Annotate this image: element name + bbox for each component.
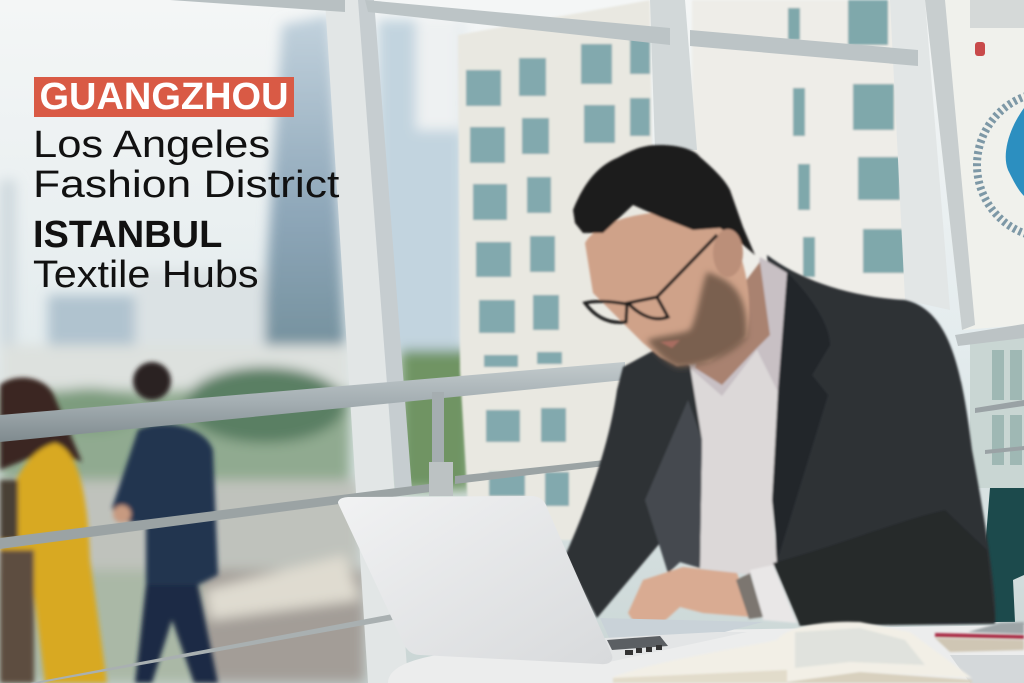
jacket right side [767,255,995,626]
person in navy suit [112,362,218,683]
beard [647,272,747,367]
right side railing and building [955,324,1024,488]
teal chair [982,488,1024,622]
shirt [690,258,787,575]
table [388,625,1024,683]
hand [628,567,752,627]
wristwatch [736,573,763,619]
hair [573,145,755,255]
background: blurred tower behind centre window [378,20,472,490]
wall poster with world map dial [925,0,1024,330]
lapel [767,255,830,558]
ear [713,229,743,277]
window frames [170,0,950,683]
glasses [585,235,717,322]
text: Textile Hubs: Textile Hubs [33,254,259,296]
mouth [660,340,680,348]
background: right building [692,0,907,300]
red notebook on table [935,622,1024,652]
jacket left side [565,347,702,618]
neck [695,262,770,385]
text: Fashion District: Fashion District [33,164,339,206]
highlighted label: Guangzhou: GUANGZHOU [39,76,289,118]
person in yellow coat [0,378,107,683]
text: Istanbul: ISTANBUL [33,214,222,256]
jacket right sleeve [773,510,995,626]
shirt cuff [750,565,797,623]
background: white building with teal windows [458,0,655,540]
balcony railing [0,362,625,683]
open book on table [613,622,972,683]
laptop [338,496,763,664]
man [565,145,995,627]
background: blurred skyline through left window [0,15,365,683]
face [585,212,749,366]
headline text block [33,76,340,296]
text: Los Angeles: Los Angeles [33,124,270,166]
